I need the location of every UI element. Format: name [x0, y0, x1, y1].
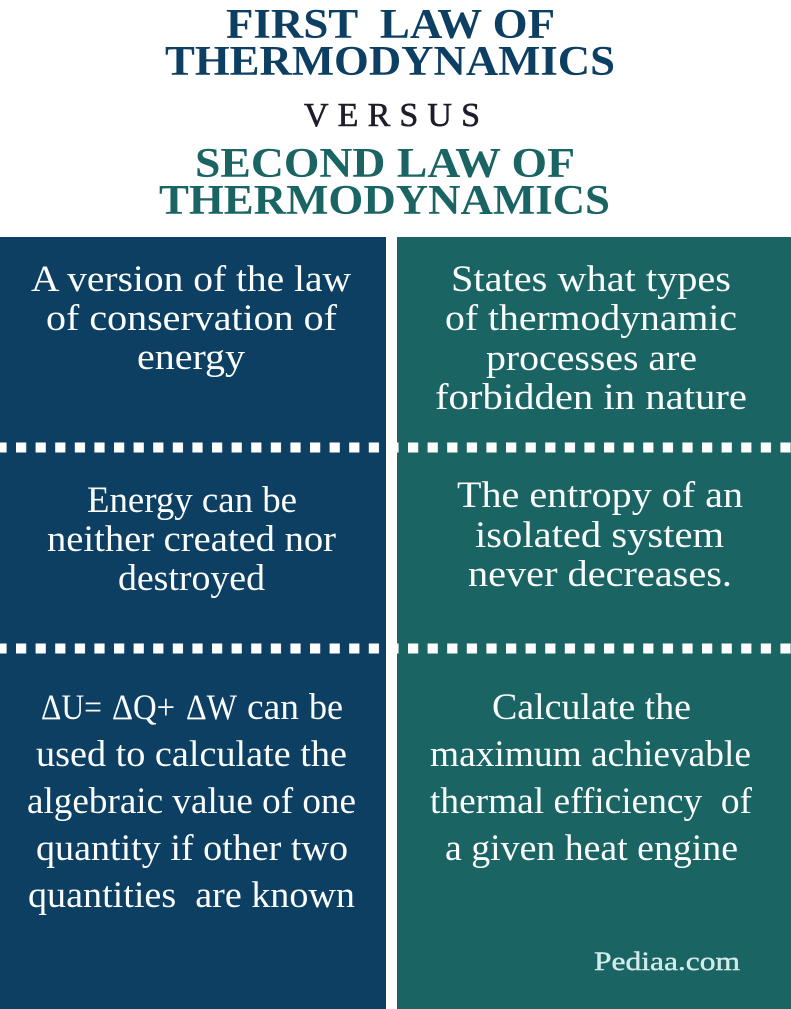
- text: second law definition: States what types: [451, 258, 731, 299]
- text: second law definition: forbidden in nature: [435, 376, 747, 417]
- text: first law equation use: algebraic value of one: [27, 780, 356, 821]
- text: second law application: thermal efficiency of: [430, 780, 753, 821]
- text: first law definition: of conservation of: [46, 297, 338, 338]
- text: first law equation use: ΔQ+: [112, 687, 175, 727]
- text: entropy statement: isolated system: [475, 514, 724, 555]
- text: first law equation use: quantities are known: [28, 874, 355, 915]
- text: energy statement: [47, 479, 336, 598]
- panel: second law column: [397, 237, 791, 1009]
- panel: first law column: [0, 237, 386, 1009]
- text: entropy statement: The entropy of an: [457, 474, 743, 515]
- title: second law: THERMODYNAMICS: [159, 178, 610, 224]
- logo: Pediaa.com: Pediaa.com: [594, 947, 740, 976]
- text: entropy statement: never decreases.: [468, 553, 732, 594]
- text: entropy statement: [457, 474, 743, 594]
- text: first law equation use: ΔW: [186, 687, 237, 727]
- title: first law: THERMODYNAMICS: [165, 39, 615, 85]
- text: first law equation use: quantity if other two: [36, 827, 348, 868]
- text: energy statement: neither created nor: [47, 518, 336, 559]
- text: second law application: maximum achievable: [430, 733, 751, 774]
- text: energy statement: Energy can be: [87, 479, 297, 520]
- title: second law: [159, 141, 610, 224]
- text: first law equation use: be: [309, 686, 343, 727]
- text: first law equation use: ΔU=: [41, 687, 102, 727]
- text: second law definition: processes are: [486, 337, 697, 378]
- text: second law definition: of thermodynamic: [445, 297, 737, 338]
- text: second law application: a given heat engine: [445, 827, 738, 868]
- text: first law equation use: [27, 686, 356, 915]
- text: second law application: Calculate the: [492, 686, 691, 727]
- text: second law application: [430, 686, 753, 868]
- text: first law definition: energy: [137, 336, 246, 377]
- text: first law equation use: can: [247, 686, 299, 727]
- title: first law: FIRST LAW OF: [226, 2, 555, 48]
- title: first law: [165, 2, 615, 85]
- text: first law equation use: used to calculate the: [36, 733, 347, 774]
- text: first law definition: [31, 258, 352, 377]
- title: second law: SECOND LAW OF: [195, 141, 575, 187]
- heading: versus: VERSUS: [304, 97, 480, 134]
- text: second law definition: [435, 258, 747, 417]
- text: energy statement: destroyed: [118, 557, 265, 598]
- text: first law definition: A version of the law: [31, 258, 352, 299]
